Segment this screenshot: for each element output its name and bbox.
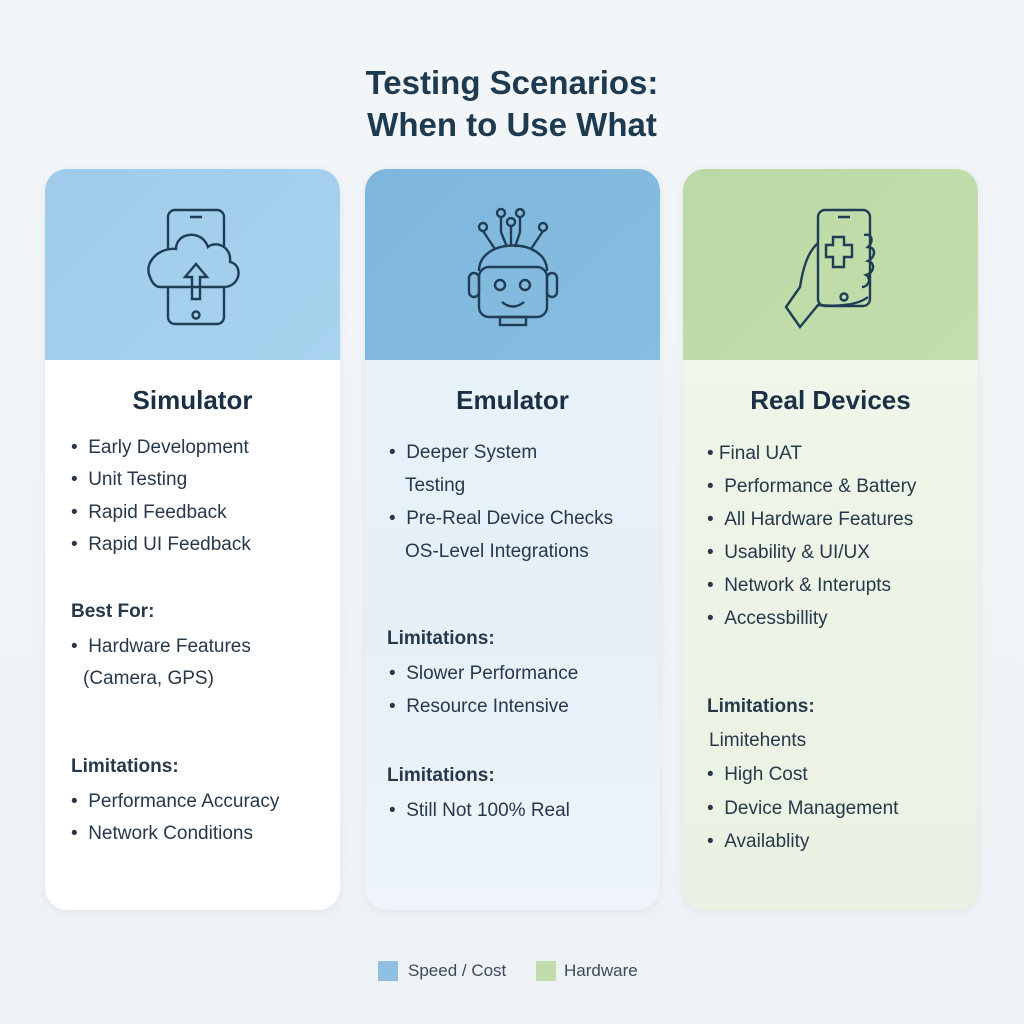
legend: [378, 961, 638, 981]
heading: real devices: Real Devices: [750, 385, 911, 415]
list: emulator uses: [387, 442, 613, 821]
panel: simulator: • Hardware Features: [71, 636, 251, 657]
panel: simulator: Best For:: [71, 601, 154, 622]
title: Testing Scenarios:: [366, 64, 658, 101]
panel: emulator: OS-Level Integrations: [405, 541, 589, 562]
panel: emulator: Limitations:: [387, 765, 495, 786]
panel: real devices: • Availablity: [707, 831, 809, 852]
panel: real devices: • Device Management: [707, 798, 898, 819]
panel: real devices: • Performance & Battery: [707, 476, 916, 497]
panel: real devices: Limitehents: [709, 730, 806, 751]
panel: simulator: • Rapid UI Feedback: [71, 534, 251, 555]
panel: real devices: • Accessbillity: [707, 608, 828, 629]
panel: emulator: • Still Not 100% Real: [389, 800, 570, 821]
panel: simulator: • Performance Accuracy: [71, 791, 279, 812]
panel: simulator: • Unit Testing: [71, 469, 187, 490]
heading: simulator: Simulator: [133, 385, 252, 415]
panel: simulator: • Early Development: [71, 437, 249, 458]
heading: emulator: Emulator: [456, 385, 569, 415]
panel: real devices: • High Cost: [707, 764, 808, 785]
panel: simulator: • Rapid Feedback: [71, 502, 227, 523]
list: real devices uses: [707, 443, 916, 852]
panel: emulator: • Resource Intensive: [389, 696, 569, 717]
panel: emulator: [365, 169, 660, 910]
panel: real devices: Limitations:: [707, 696, 815, 717]
panel: emulator: • Pre-Real Device Checks: [389, 508, 613, 529]
list: simulator uses: [71, 437, 280, 844]
panel: real devices: • All Hardware Features: [707, 509, 913, 530]
icon: robot: [468, 208, 558, 326]
panel: simulator: (Camera, GPS): [83, 668, 214, 689]
panel: real devices: [683, 169, 978, 910]
panel: emulator: Testing: [405, 475, 465, 496]
panel: real devices: • Final UAT: [707, 443, 802, 464]
icon: hand holding phone: [784, 208, 876, 329]
title: When to Use What: [367, 106, 657, 143]
icon: phone with cloud upload: [147, 208, 240, 326]
panel: emulator: • Deeper System: [389, 442, 537, 463]
panel: real devices: • Network & Interupts: [707, 575, 891, 596]
header: real devices: [683, 169, 978, 360]
legend: hardware: Hardware: [564, 961, 638, 980]
panel: emulator: • Slower Performance: [389, 663, 578, 684]
title: [366, 64, 658, 143]
panel: emulator: Limitations:: [387, 628, 495, 649]
header: simulator: [45, 169, 340, 360]
panel: simulator: [45, 169, 340, 910]
panel: real devices: • Usability & UI/UX: [707, 542, 870, 563]
legend: speed / cost: Speed / Cost: [408, 961, 506, 980]
panel: simulator: Limitations:: [71, 756, 179, 777]
panel: simulator: • Network Conditions: [71, 823, 253, 844]
legend: hardware: [536, 961, 638, 981]
header: emulator: [365, 169, 660, 360]
